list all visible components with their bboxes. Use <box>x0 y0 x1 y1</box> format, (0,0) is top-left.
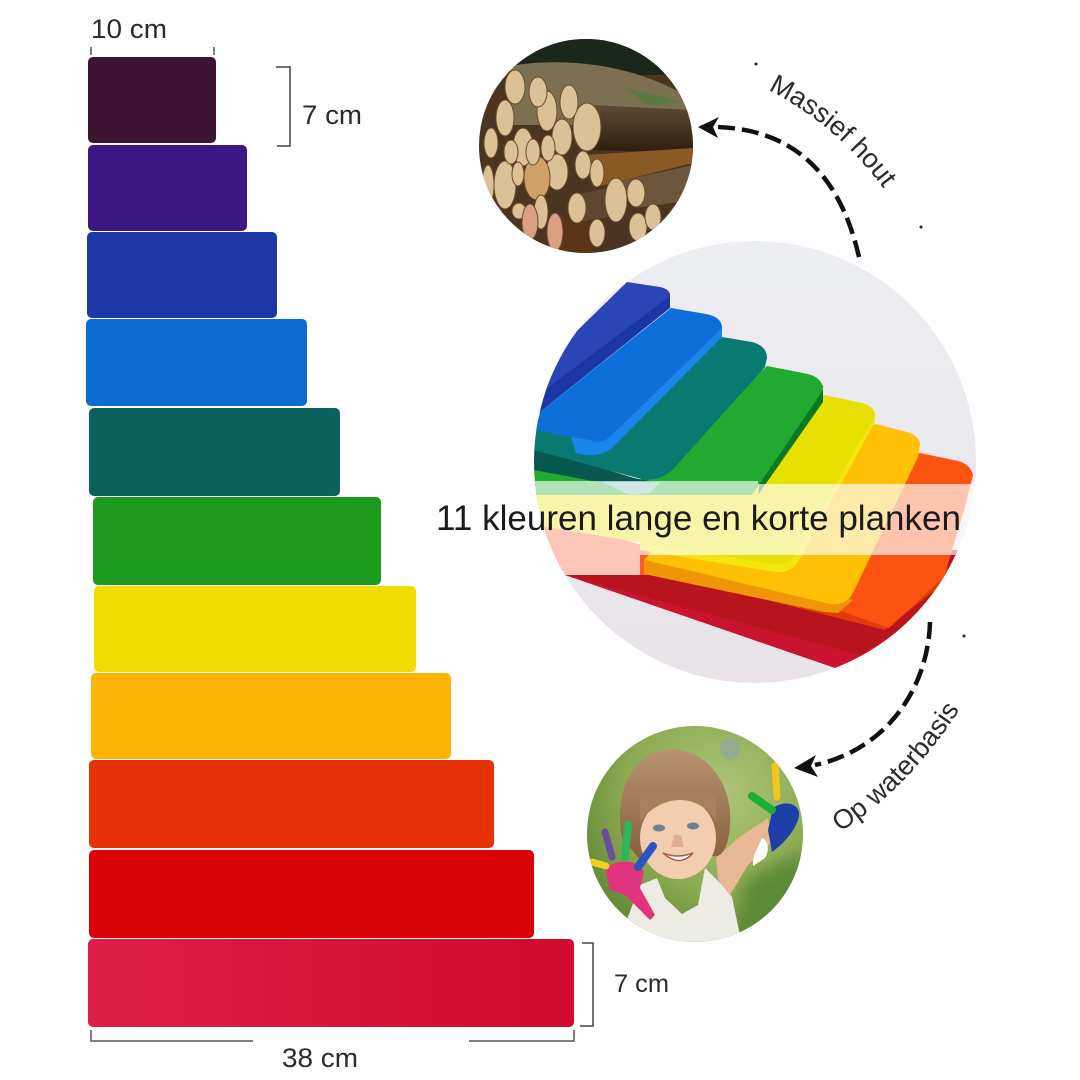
green plank side <box>758 385 823 495</box>
plank 3: dark blue <box>87 232 277 318</box>
photo: wood logs <box>479 39 693 255</box>
dimension: 7 cm bottom <box>580 943 669 1026</box>
yellow plank <box>534 395 875 564</box>
dimension: 38 cm: 38 cm <box>282 1043 358 1073</box>
hair <box>620 749 730 860</box>
yellow plank side <box>640 413 875 572</box>
face <box>640 797 716 879</box>
blue plank bevel <box>571 326 722 455</box>
label: Op waterbasis: Op waterbasis <box>834 704 958 828</box>
left hand <box>605 862 655 920</box>
orange plank <box>840 453 973 628</box>
plank 7: yellow <box>94 586 416 672</box>
arm <box>716 818 772 895</box>
plank 10: red <box>89 850 534 938</box>
dimension: 7 cm bottom: 7 cm <box>614 970 669 998</box>
label: Massief hout: Massief hout <box>770 74 896 188</box>
dimension: 10 cm: 10 cm <box>91 14 167 44</box>
smile <box>663 853 693 860</box>
crimson plank edge <box>565 560 975 668</box>
plank 11: crimson <box>88 939 574 1027</box>
amber plank <box>645 424 920 604</box>
plank 6: green <box>93 497 381 585</box>
dots <box>754 62 966 638</box>
plank 8: amber <box>91 673 451 759</box>
plank 5: teal <box>89 408 340 496</box>
plank 4: blue <box>86 319 307 406</box>
green plank <box>534 366 823 495</box>
band reflection <box>602 482 660 495</box>
dimension: 38 cm <box>91 1030 574 1073</box>
log bodies <box>590 105 693 153</box>
dimension: 7 cm top <box>276 67 362 146</box>
teal plank <box>534 337 767 480</box>
dark blue plank <box>546 282 670 388</box>
right hand <box>768 803 799 852</box>
photo: child with painted hands <box>587 726 805 945</box>
log ends <box>482 70 661 251</box>
dress <box>628 868 740 942</box>
red plank edge <box>565 550 975 655</box>
left pale pink plank part <box>544 526 650 575</box>
arrow: to wood photo <box>698 117 859 257</box>
translucent text band <box>534 481 975 575</box>
eyes <box>653 824 665 832</box>
blue plank <box>536 308 722 442</box>
arrow: to child photo <box>794 622 930 777</box>
plank stack <box>86 57 574 1027</box>
photo: rainbow planks <box>534 241 976 684</box>
title text: 11 kleuren lange en korte planken <box>436 499 961 538</box>
plank 1: dark plum <box>88 57 216 143</box>
teal plank side <box>534 447 654 484</box>
plank 9: orange red <box>89 760 494 848</box>
dimension: 10 cm <box>91 14 214 55</box>
dimension: 7 cm top: 7 cm <box>302 100 362 130</box>
plank 2: purple <box>88 145 247 231</box>
amber plank side <box>644 558 853 613</box>
orange plank side <box>768 568 948 630</box>
dark blue plank side <box>540 293 670 413</box>
